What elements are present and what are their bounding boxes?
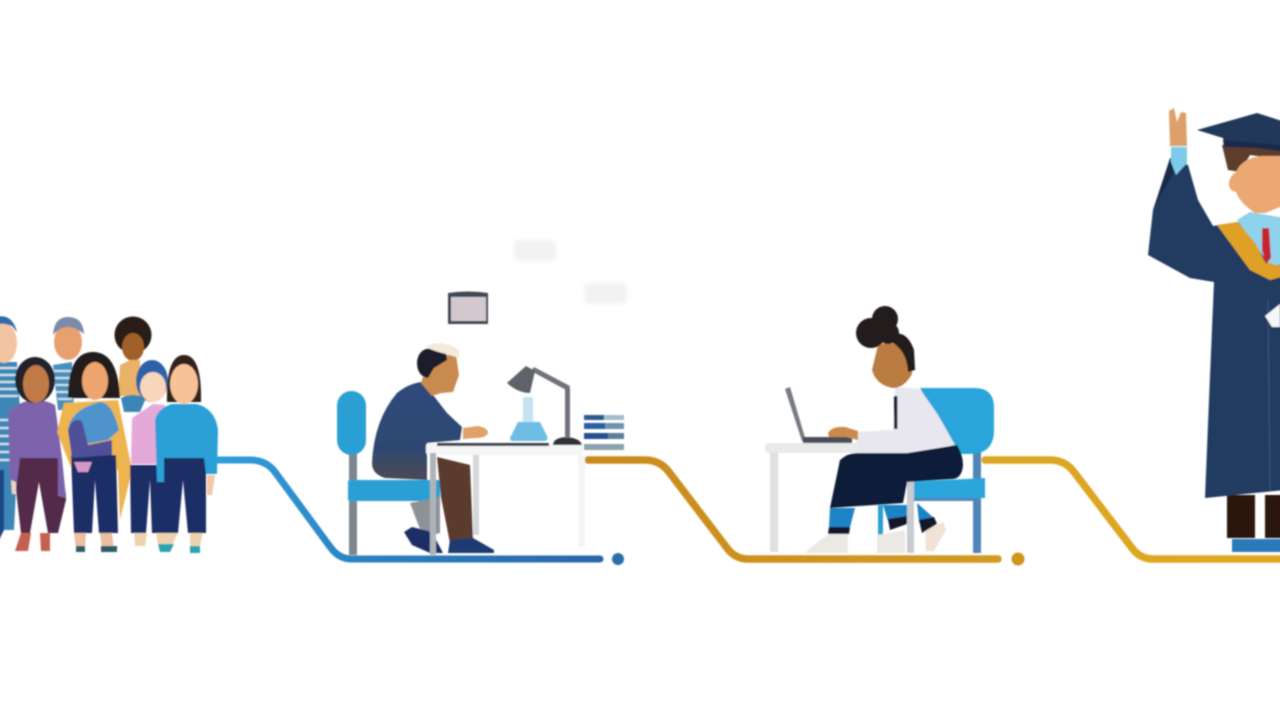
person: pink top [122, 360, 168, 546]
icon: laptop [785, 387, 852, 443]
icon: stack of books [584, 415, 624, 450]
diploma [1265, 304, 1280, 327]
faint background clouds [514, 240, 627, 304]
path line: yellow segment [985, 460, 1280, 559]
hand and cuff [1169, 108, 1187, 175]
chair: blue chair [878, 388, 994, 553]
group of people [0, 316, 218, 553]
collar, tie and stole [1217, 212, 1280, 280]
person: yellow cardigan [57, 352, 132, 552]
icon: picture frame [448, 292, 488, 324]
mortarboard cap [1197, 113, 1280, 152]
gown [1148, 158, 1280, 498]
path line: gold segment [588, 460, 1024, 566]
path line: blue segment [218, 460, 624, 565]
legs and shoes [1227, 495, 1280, 552]
scene: woman at laptop [765, 306, 994, 553]
person: back left in striped top [0, 316, 20, 546]
person: purple top [8, 357, 66, 551]
person: back right with curly hair [114, 316, 152, 412]
person: graduate in gown [1148, 108, 1280, 552]
person: blue sweater [155, 355, 218, 553]
person: seated man [372, 343, 494, 553]
scene: man at desk with lab flask [337, 343, 624, 555]
icon: desk lamp [507, 366, 582, 445]
person: seated woman [805, 306, 963, 553]
desk: white table [426, 443, 585, 555]
icon: lab flask [510, 397, 548, 441]
person: back centre in striped top [53, 317, 84, 410]
chair: blue office chair [337, 391, 440, 555]
desk: light grey table [765, 443, 914, 553]
head [1222, 145, 1280, 213]
